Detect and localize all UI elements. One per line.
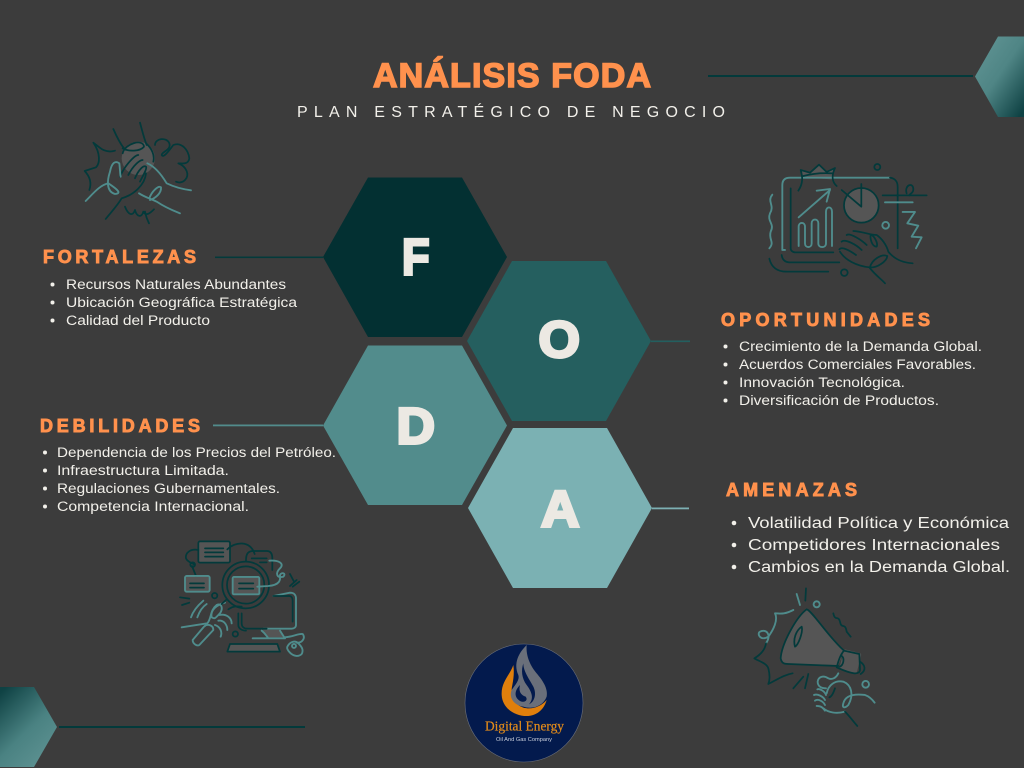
list: oportunidades: Acuerdos Comerciales Favorables. — [739, 357, 976, 372]
list: amenazas: Volatilidad Política y Económica — [748, 515, 1009, 532]
list: amenazas: Competidores Internacionales — [748, 537, 1000, 554]
icon: growth chart and hand — [769, 164, 927, 283]
logo name: Digital Energy — [485, 718, 564, 734]
panel: oportunidades — [721, 310, 982, 408]
list: oportunidades: Diversificación de Productos. — [739, 393, 939, 408]
icon: megaphone in hand — [754, 588, 875, 726]
list: amenazas: Cambios en la Demanda Global. — [748, 559, 1010, 576]
heading: amenazas: AMENAZAS — [726, 480, 857, 500]
hexagon O — [467, 261, 651, 421]
logo flame — [502, 645, 547, 716]
list: fortalezas: Recursos Naturales Abundantes — [66, 277, 286, 292]
list: amenazas — [732, 515, 1010, 576]
panel: fortalezas — [43, 247, 298, 328]
corner hexagon top right with line — [708, 36, 1024, 117]
hexagon D — [323, 346, 507, 505]
corner hexagon bottom left with line — [0, 687, 305, 767]
list: debilidades: Competencia Internacional. — [57, 499, 249, 514]
hexagon F: F — [402, 228, 430, 286]
icon: digital network with monitor — [180, 541, 304, 656]
list: oportunidades: Crecimiento de la Demanda Global. — [739, 339, 982, 354]
list: fortalezas: Ubicación Geográfica Estratégica — [66, 295, 298, 310]
heading: oportunidades: OPORTUNIDADES — [721, 310, 930, 330]
title: ANÁLISIS FODA — [373, 57, 651, 95]
connector: debilidades — [213, 424, 323, 426]
panel: debilidades — [40, 416, 336, 514]
logo tagline: Oil And Gas Company — [496, 737, 552, 743]
connector: amenazas — [652, 508, 689, 509]
list: oportunidades — [724, 339, 982, 408]
connector: oportunidades — [651, 340, 690, 342]
list: fortalezas: Calidad del Producto — [66, 313, 210, 328]
hexagon A: A — [541, 480, 580, 538]
icon: handshake clap — [85, 123, 191, 223]
hexagon A — [468, 428, 652, 588]
heading: fortalezas: FORTALEZAS — [43, 247, 196, 267]
list: debilidades: Regulaciones Gubernamentales. — [57, 481, 280, 496]
panel: amenazas — [726, 480, 1010, 576]
hexagon O: O — [538, 311, 580, 368]
hexagon D: D — [396, 398, 435, 454]
connector: fortalezas — [215, 256, 323, 258]
list: debilidades: Infraestructura Limitada. — [57, 463, 229, 478]
logo: Digital Energy — [465, 644, 583, 762]
list: debilidades: Dependencia de los Precios del Petróleo. — [57, 445, 336, 460]
list: debilidades — [43, 445, 336, 514]
heading: debilidades: DEBILIDADES — [40, 416, 200, 436]
hexagon F — [323, 178, 507, 337]
list: oportunidades: Innovación Tecnológica. — [739, 375, 905, 390]
list: fortalezas — [50, 277, 298, 328]
subtitle: PLAN ESTRATÉGICO DE NEGOCIO — [297, 102, 725, 121]
